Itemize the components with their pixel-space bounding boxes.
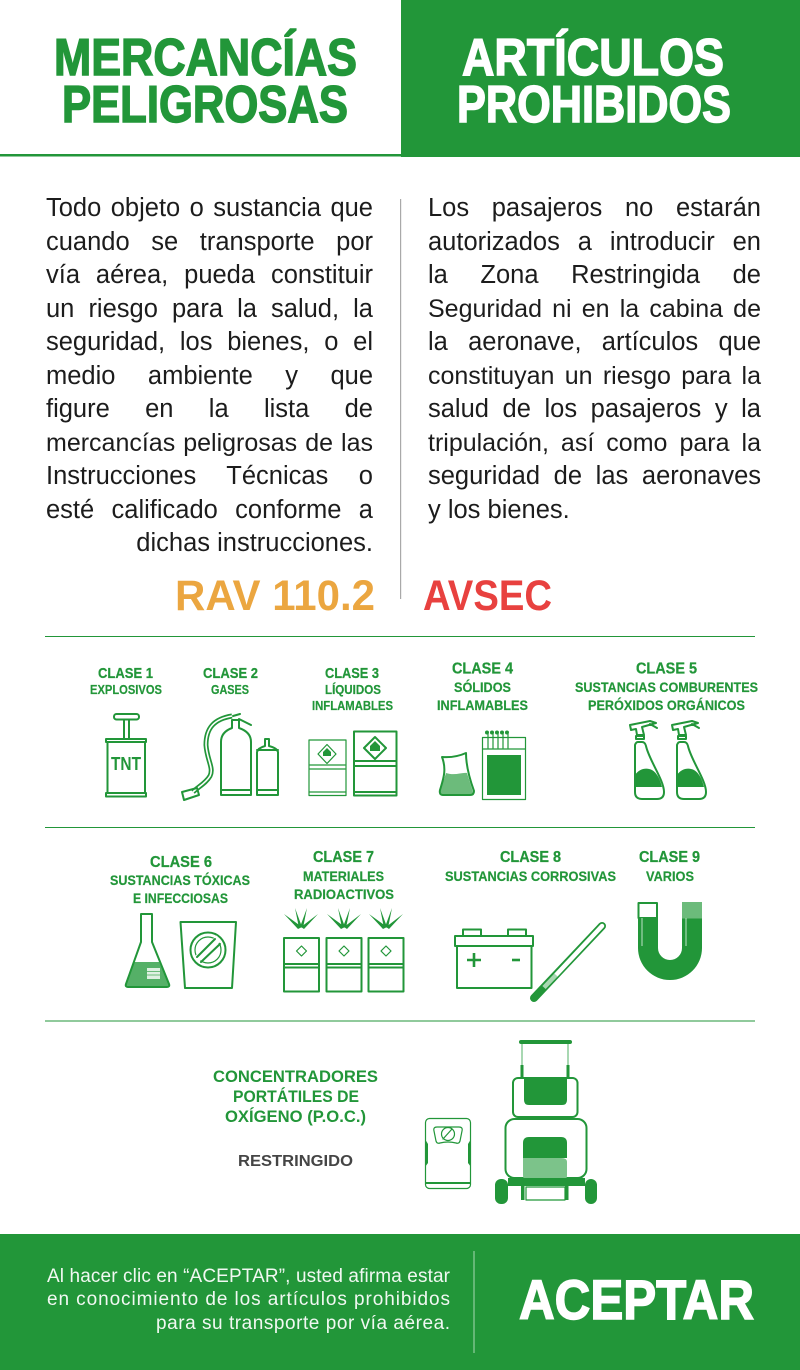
clase 1: explosivos: EXPLOSIVOS (90, 683, 162, 697)
icon: TNT detonator: TNT (111, 754, 141, 774)
poc text block: RESTRINGIDO (238, 1153, 353, 1170)
text block: definición de artículos prohibidos: seguridad de las aeronaves (428, 462, 761, 490)
header left rule (0, 154, 401, 156)
title: mercancías peligrosas: MERCANCÍAS (54, 29, 357, 87)
title: mercancías peligrosas: PELIGROSAS (62, 76, 348, 134)
clase 6: sustancias tóxicas e infecciosas (110, 854, 250, 988)
text block: definición de artículos prohibidos: constituyan un riesgo para la (428, 362, 761, 390)
text block: definición de mercancías peligrosas: figure en la lista de (46, 395, 373, 423)
icon: radioactive drum 1 (284, 908, 319, 992)
header right green panel (401, 0, 800, 157)
clase 8: sustancias corrosivas: CLASE 8 (500, 849, 561, 866)
text block: definición de mercancías peligrosas (46, 194, 373, 557)
clase 6: sustancias tóxicas e infecciosas: CLASE 6 (150, 854, 212, 871)
text block: definición de artículos prohibidos: Seguridad ni en la cabina de (428, 294, 761, 322)
clase 9: varios: CLASE 9 (639, 849, 700, 866)
clase 8: sustancias corrosivas (445, 849, 616, 998)
label: RAV 110.2: RAV 110.2 (175, 572, 375, 620)
text block: definición de artículos prohibidos (428, 194, 762, 524)
clase 3: líquidos inflamables (309, 665, 396, 796)
clase 4: sólidos inflamables: INFLAMABLES (437, 698, 528, 713)
icon: spray bottle 1 (630, 721, 664, 799)
icon: radioactive drum 3 (368, 908, 404, 992)
clase 3: líquidos inflamables: CLASE 3 (325, 665, 379, 682)
icon: corrosive rod (534, 926, 602, 998)
text block: definición de artículos prohibidos: tripulación, así como para la (428, 428, 761, 456)
text block: definición de mercancías peligrosas: Instrucciones Técnicas o (46, 462, 373, 490)
clase 2: gases (182, 665, 278, 800)
icon: matchbox (482, 730, 526, 800)
clase 6: sustancias tóxicas e infecciosas: SUSTANCIAS TÓXICAS (110, 873, 250, 888)
label: AVSEC: AVSEC (423, 572, 552, 620)
poc text block: CONCENTRADORES (213, 1067, 378, 1086)
clase 4: sólidos inflamables: SÓLIDOS (454, 680, 511, 695)
text block: definición de mercancías peligrosas: seguridad, los bienes, o el (46, 328, 373, 356)
icon: flask (126, 914, 169, 987)
text block: definición de artículos prohibidos: Los pasajeros no estarán (428, 194, 761, 222)
text block: definición de mercancías peligrosas: medio ambiente y que (46, 362, 373, 390)
clase 7: materiales radioactivos (284, 849, 404, 992)
icon: fire extinguisher and spray can (182, 714, 278, 800)
text block: definición de mercancías peligrosas: dichas instrucciones. (136, 529, 373, 557)
clase 9: varios (638, 849, 702, 980)
accept button label: ACEPTAR (519, 1268, 754, 1331)
text block: definición de artículos prohibidos: salud de los pasajeros y la (428, 395, 761, 423)
text block: definición de artículos prohibidos: la Zona Restringida de (428, 261, 761, 289)
text block: definición de mercancías peligrosas: esté calificado conforme a (46, 496, 373, 524)
icon: portable oxygen unit (425, 1118, 471, 1188)
icon: large labelled drum (354, 732, 396, 796)
clase 9: varios: VARIOS (646, 869, 694, 884)
clase 1: explosivos (90, 665, 162, 796)
title: artículos prohibidos (457, 29, 731, 134)
poc text block: OXÍGENO (P.O.C.) (225, 1107, 366, 1126)
icon: sack (440, 753, 474, 795)
footer notice: en conocimiento de los artículos prohibidos (47, 1289, 450, 1310)
icon: biohazard bag (180, 922, 236, 988)
clase 4: sólidos inflamables (437, 660, 528, 800)
clase 6: sustancias tóxicas e infecciosas: E INFECCIOSAS (133, 891, 228, 906)
clase 5: sustancias comburentes, peróxidos orgánicos: PERÓXIDOS ORGÁNICOS (588, 698, 745, 713)
text block: definición de mercancías peligrosas: cuando se transporte por (46, 228, 373, 256)
icon: oxygen concentrator on cart (495, 1040, 597, 1204)
text block: definición de mercancías peligrosas: mercancías peligrosas de las (46, 428, 373, 456)
text block: definición de mercancías peligrosas: vía aérea, pueda constituir (46, 261, 373, 289)
clase 5: sustancias comburentes, peróxidos orgánicos (575, 660, 758, 799)
poc text block: PORTÁTILES DE (233, 1087, 359, 1106)
icon: small labelled drum (309, 740, 346, 796)
text block: definición de artículos prohibidos: la aeronave, artículos que (428, 328, 761, 356)
clase 3: líquidos inflamables: LÍQUIDOS (325, 682, 381, 697)
clase 2: gases: GASES (211, 683, 249, 697)
footer notice: Al hacer clic en “ACEPTAR”, usted afirma estar (47, 1266, 451, 1287)
clase 7: materiales radioactivos: CLASE 7 (313, 849, 374, 866)
footer notice (47, 1266, 451, 1334)
clase 5: sustancias comburentes, peróxidos orgánicos: CLASE 5 (636, 660, 697, 678)
title: mercancías peligrosas (54, 29, 357, 134)
clase 4: sólidos inflamables: CLASE 4 (452, 660, 513, 678)
clase 7: materiales radioactivos: RADIOACTIVOS (294, 887, 394, 902)
title: artículos prohibidos: PROHIBIDOS (457, 76, 731, 134)
icon: magnet (638, 902, 702, 980)
text block: definición de mercancías peligrosas: un riesgo para la salud, la (46, 294, 373, 322)
footer notice: para su transporte por vía aérea. (156, 1313, 450, 1334)
text block: definición de artículos prohibidos: y los bienes. (428, 496, 570, 524)
clase 3: líquidos inflamables: INFLAMABLES (312, 699, 393, 713)
clase 8: sustancias corrosivas: SUSTANCIAS CORROSIVAS (445, 869, 616, 884)
footer band (0, 1234, 800, 1370)
header band (0, 0, 800, 157)
clase 5: sustancias comburentes, peróxidos orgánicos: SUSTANCIAS COMBURENTES (575, 680, 758, 695)
clase 7: materiales radioactivos: MATERIALES (303, 869, 384, 884)
clase 2: gases: CLASE 2 (203, 665, 258, 682)
icon: battery (455, 930, 533, 988)
text block: definición de artículos prohibidos: autorizados a introducir en (428, 228, 761, 256)
poc text block (213, 1067, 378, 1170)
clase 1: explosivos: CLASE 1 (98, 665, 153, 682)
text block: definición de mercancías peligrosas: Todo objeto o sustancia que (46, 194, 373, 222)
icon: radioactive drum 2 (326, 908, 362, 992)
title: artículos prohibidos: ARTÍCULOS (462, 29, 724, 87)
icon: spray bottle 2 (672, 721, 706, 799)
